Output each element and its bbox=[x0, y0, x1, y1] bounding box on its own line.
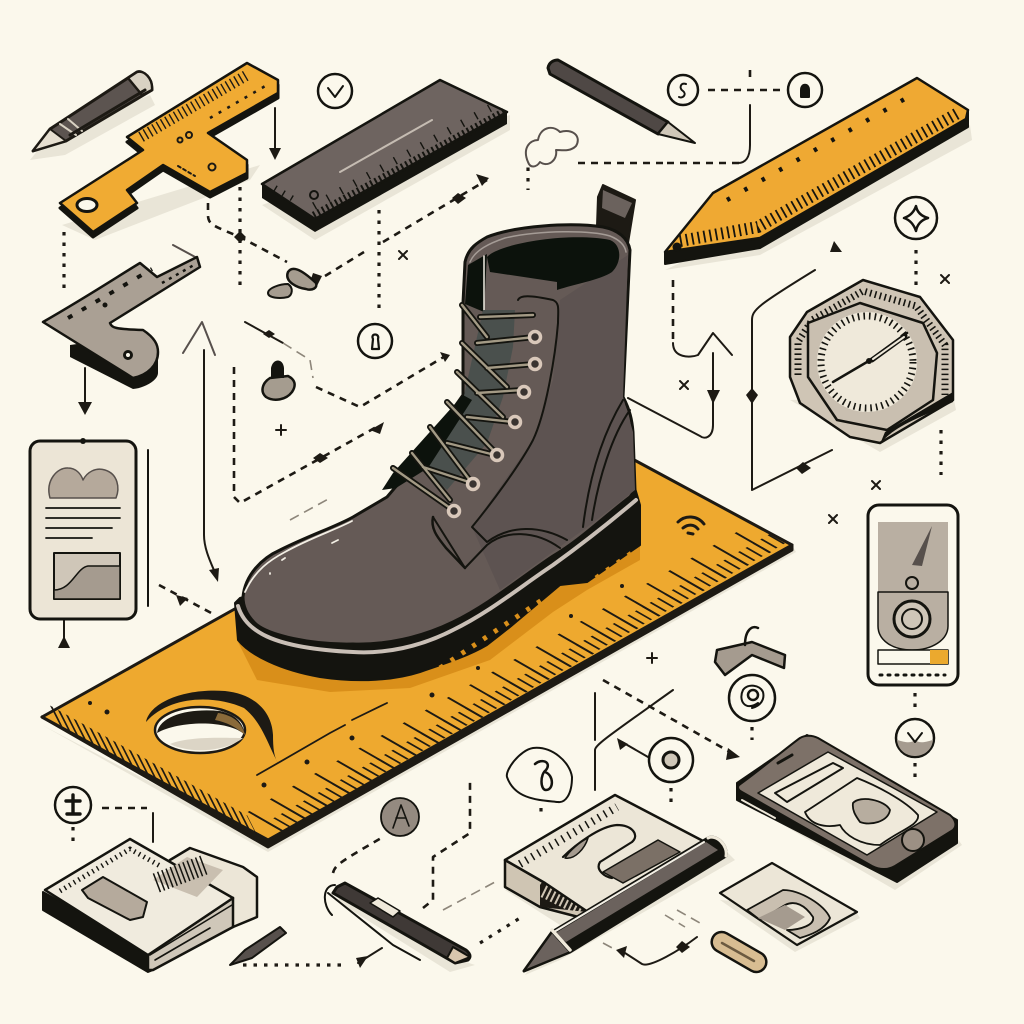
icon: eraser block bbox=[505, 795, 705, 920]
black gusset strip bbox=[382, 395, 472, 490]
gauge bottom edge bbox=[880, 392, 953, 444]
small x marks bbox=[276, 251, 949, 663]
icon: left bracket ruler bbox=[43, 257, 200, 389]
icon: card with arc bbox=[720, 863, 857, 945]
icon: T-shaped yellow ruler bbox=[60, 63, 278, 237]
tongue bbox=[425, 310, 515, 490]
icon: small stones bbox=[268, 269, 316, 298]
faint dashes bbox=[283, 343, 700, 950]
laces bbox=[393, 305, 535, 510]
wifi mark bbox=[678, 517, 704, 534]
icon: small pill bbox=[708, 928, 770, 976]
icon: circle chevron bbox=[896, 719, 934, 757]
sole lugs bbox=[440, 550, 636, 668]
icon: circle check bbox=[318, 74, 352, 108]
toe highlight bbox=[245, 521, 352, 592]
right side shade bbox=[472, 255, 635, 590]
card: left phone card bbox=[30, 438, 148, 619]
icon: circle arrow badge bbox=[381, 798, 419, 836]
icon: big yellow ruler pencil bbox=[665, 78, 968, 264]
ticks bbox=[680, 113, 958, 241]
icon: small pin bbox=[263, 360, 295, 400]
boot bbox=[235, 185, 640, 680]
icon: circle t bbox=[55, 787, 91, 823]
icon: swirl blob with letter bbox=[507, 748, 572, 802]
long bottom edge ticks bbox=[265, 532, 772, 822]
icon: right phone bbox=[868, 505, 958, 685]
sole bbox=[235, 488, 640, 680]
panel seams bbox=[433, 296, 630, 568]
solid connector lines bbox=[64, 105, 832, 965]
icon: circle s bbox=[668, 75, 698, 105]
left collar strip bbox=[465, 254, 487, 312]
icon: circle diamond bbox=[895, 197, 937, 239]
main ruler bbox=[42, 455, 792, 847]
ruler shadow below boot bbox=[237, 520, 640, 692]
dotted connector lines bbox=[64, 157, 941, 965]
icon: small clasp bbox=[715, 627, 785, 675]
icon: circle swirl bbox=[729, 675, 775, 721]
short bottom edge ticks bbox=[274, 537, 781, 827]
icon: bottom-left box bbox=[43, 839, 257, 972]
icon: large pen bbox=[524, 837, 726, 971]
icon: cloud bbox=[526, 128, 578, 166]
icon: small bottom pencil bbox=[230, 927, 286, 965]
ruler hole bbox=[146, 691, 278, 763]
opening bbox=[487, 237, 619, 290]
ruler dots bbox=[88, 584, 624, 788]
pull tab bbox=[597, 185, 635, 243]
icon: top pencil bbox=[548, 60, 695, 143]
rim line bbox=[470, 232, 626, 262]
welt bbox=[238, 500, 636, 652]
icon: circle lock bbox=[788, 73, 822, 107]
icon: circle keyhole bbox=[358, 324, 392, 358]
holes bbox=[727, 92, 917, 200]
icon: dark ruler bbox=[262, 80, 507, 232]
hatch block bbox=[153, 857, 223, 897]
ruler centre line bbox=[257, 703, 387, 775]
eyelets bbox=[448, 332, 540, 516]
arrowheads bbox=[58, 148, 842, 968]
icon: bottom pen bbox=[325, 883, 470, 963]
icon: top-left pencil bbox=[33, 72, 152, 151]
icon: circle target bbox=[649, 738, 693, 782]
gauge rim hatch bbox=[798, 291, 945, 395]
box base bbox=[43, 892, 153, 972]
soft object shadows bbox=[30, 95, 972, 975]
left edge ticks bbox=[55, 715, 252, 825]
icon: bottom right phone bbox=[737, 735, 957, 882]
icon: compass gauge bbox=[790, 280, 953, 444]
upper bbox=[243, 225, 635, 644]
dashed connector lines bbox=[102, 70, 782, 908]
